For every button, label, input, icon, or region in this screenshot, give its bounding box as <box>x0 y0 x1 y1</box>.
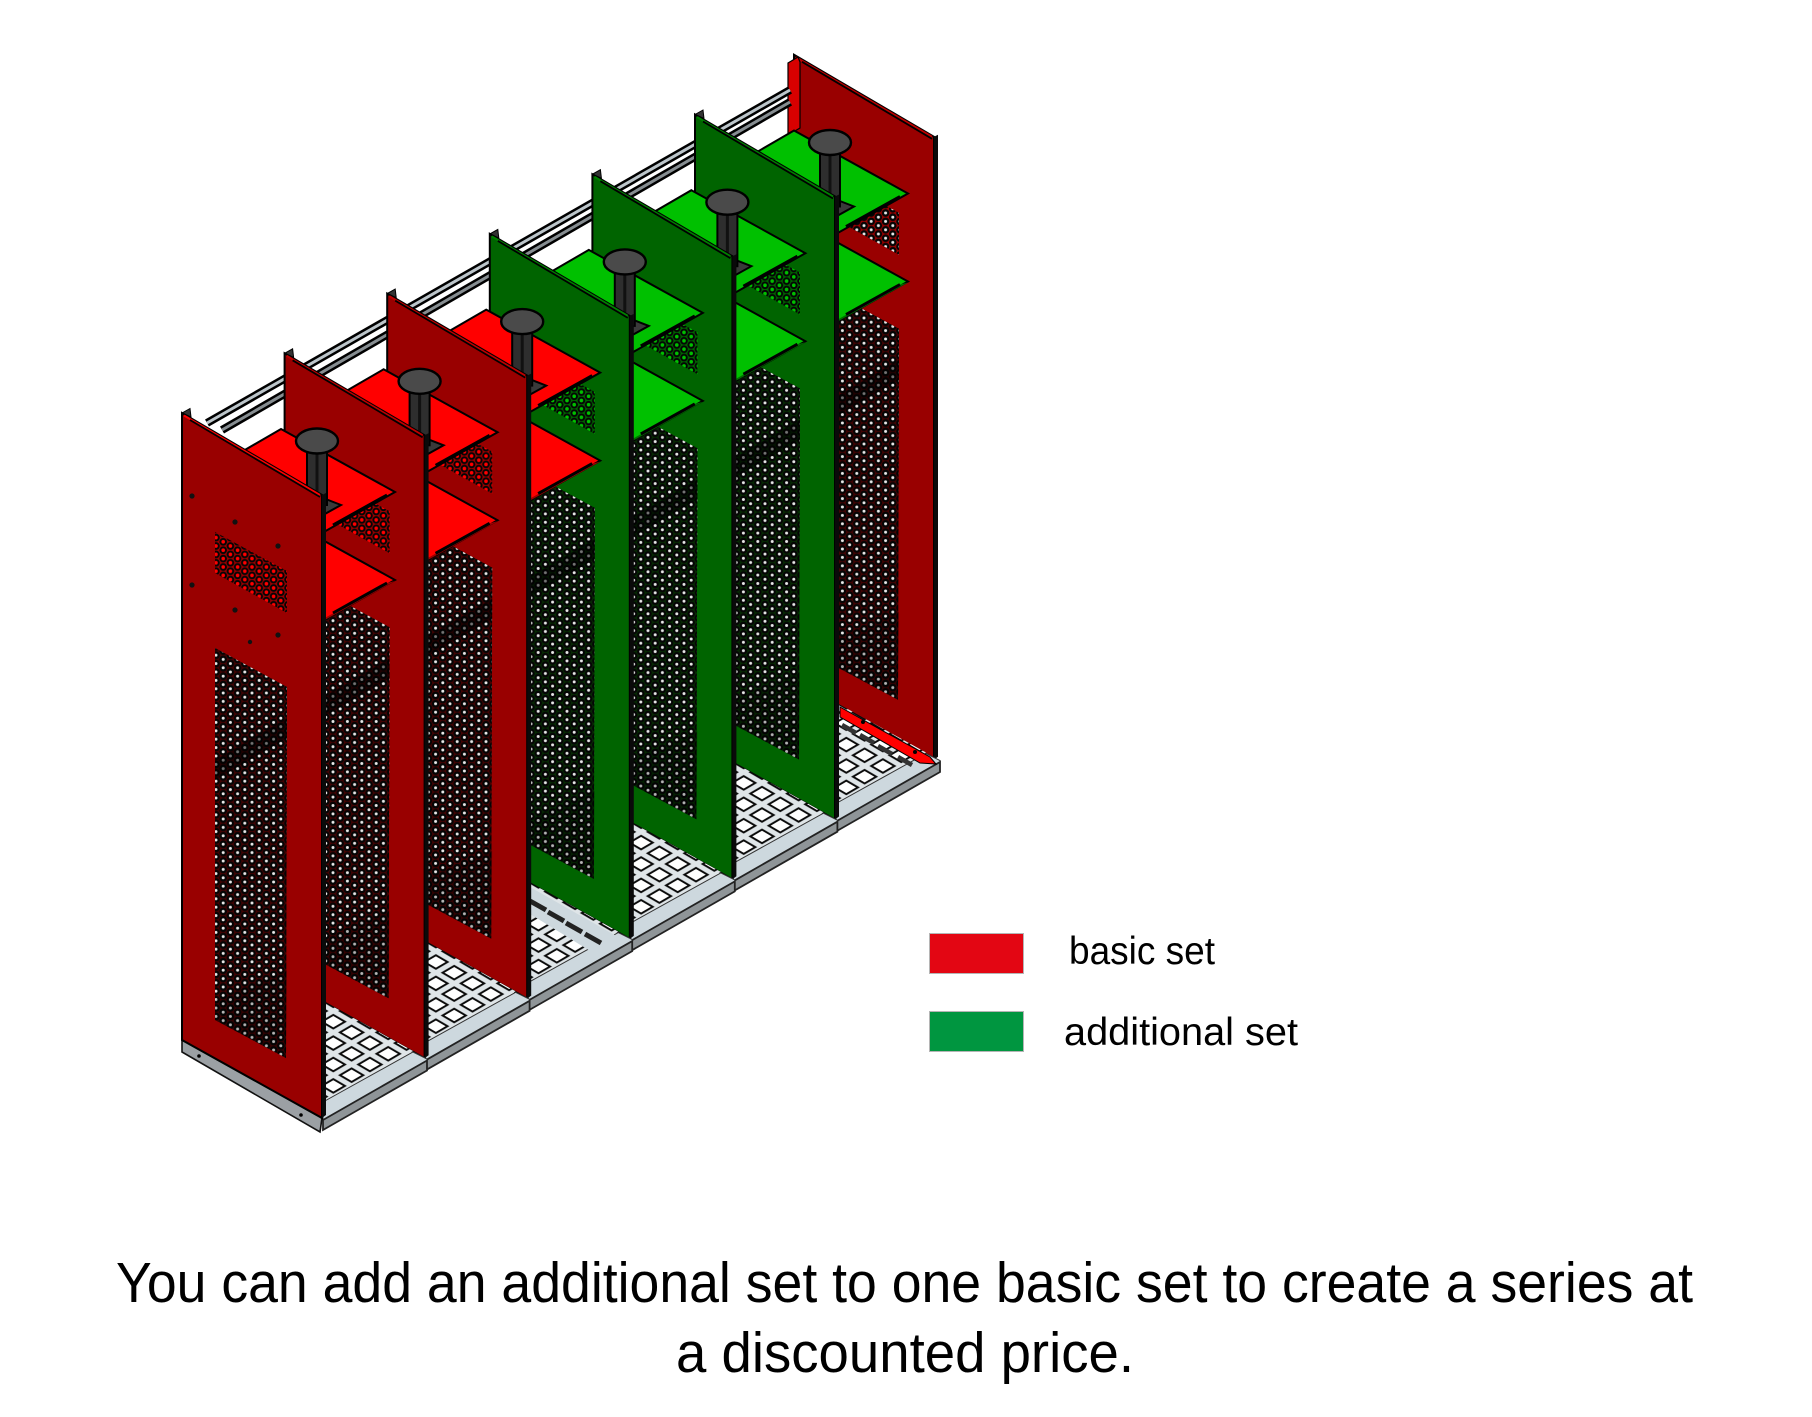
front base plate <box>182 1040 322 1132</box>
section 3: red shelves and pole <box>405 309 632 1011</box>
panel 2: basic set <box>285 349 429 1058</box>
section 5: green shelves and pole <box>610 190 837 891</box>
legend <box>930 930 1298 1054</box>
legend swatch: additional set <box>930 1012 1024 1052</box>
legend label: basic set: basic set <box>1069 930 1215 973</box>
legend label: additional set: additional set <box>1064 1011 1298 1054</box>
section 1: red shelves and pole <box>200 428 427 1130</box>
section 4: green shelves and pole <box>508 249 735 951</box>
caption: You can add an additional set to one basic set to create a series at <box>116 1251 1693 1315</box>
caption: a discounted price. <box>676 1321 1134 1385</box>
legend swatch: basic set <box>930 934 1024 974</box>
panel 3: basic set <box>387 289 531 999</box>
caption <box>116 1251 1693 1385</box>
front panel: basic set <box>182 408 326 1118</box>
back panel: basic set <box>788 55 938 760</box>
panel 4: additional set <box>490 229 634 939</box>
rails behind the panels <box>207 90 790 430</box>
shelving series illustration <box>182 55 940 1132</box>
section 6: green shelves and pole <box>713 130 940 832</box>
panel 6: additional set <box>695 110 839 820</box>
panel 5: additional set <box>592 170 736 879</box>
section 2: red shelves and pole <box>303 369 530 1070</box>
